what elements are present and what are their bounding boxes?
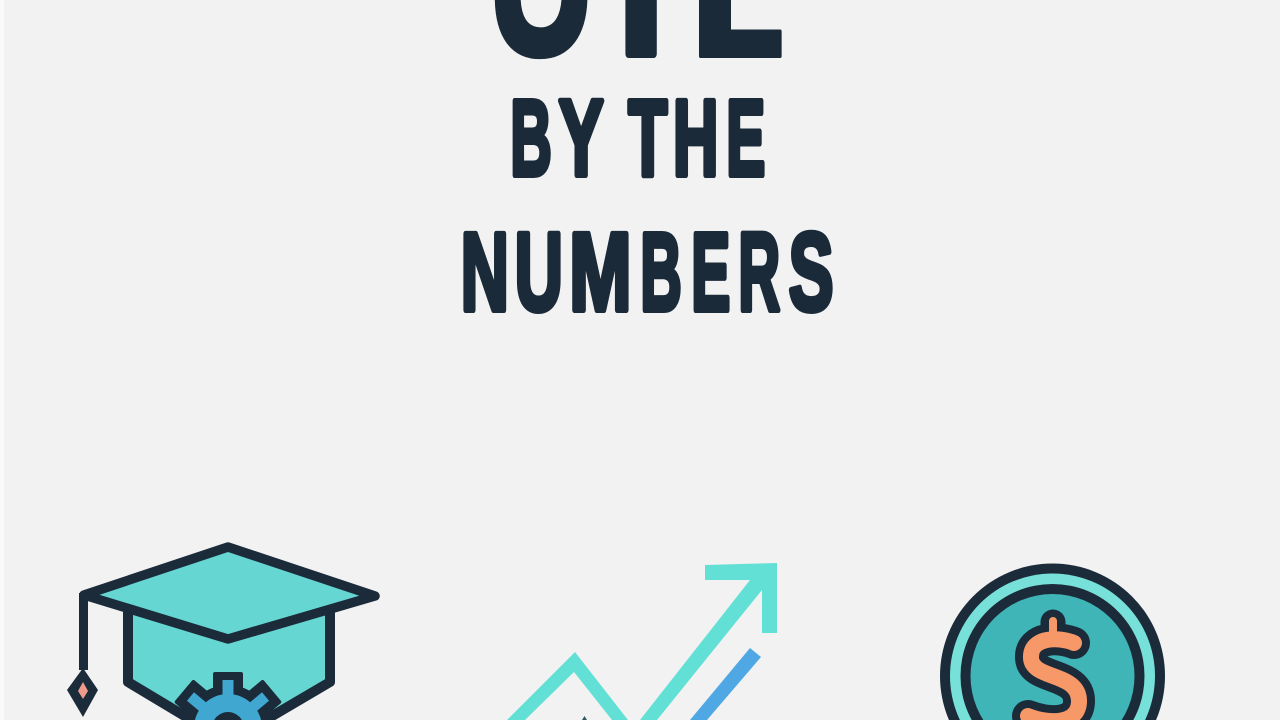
- title: numbers: R: [738, 211, 780, 334]
- icon: growth chart arrow: [507, 563, 777, 720]
- title: numbers: B: [640, 211, 682, 334]
- icon: gear: [168, 672, 288, 720]
- title: numbers: U: [515, 211, 563, 334]
- title: by the: T: [628, 78, 667, 198]
- title: by the: Y: [559, 78, 603, 198]
- title: by the: E: [726, 78, 765, 198]
- icon: dollar coin: [940, 564, 1165, 720]
- dollar sign: [1028, 621, 1079, 720]
- title: numbers: M: [569, 211, 632, 334]
- title: clipped top line: [488, 0, 786, 103]
- title: by the: H: [673, 78, 718, 198]
- icon: graduation cap with gear: [67, 547, 375, 720]
- title: numbers: N: [461, 211, 509, 334]
- title: numbers: S: [789, 211, 834, 334]
- title: numbers: E: [691, 211, 730, 334]
- title: by the: B: [510, 78, 552, 198]
